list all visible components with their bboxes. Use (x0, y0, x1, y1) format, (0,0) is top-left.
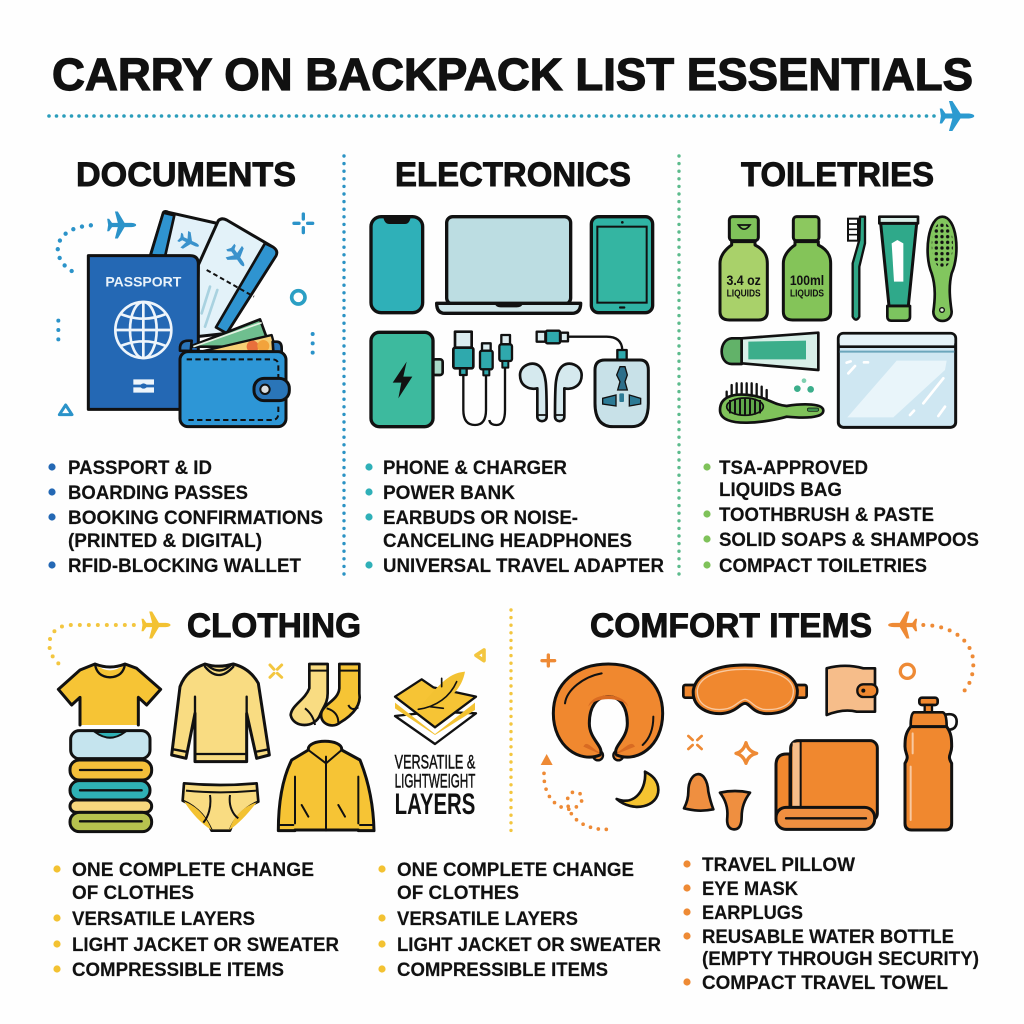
list: clothing: ONE COMPLETE CHANGE (72, 860, 314, 881)
icon: passport, tickets and wallet: PASSPORT (105, 273, 182, 289)
icon: toiletries items (720, 217, 956, 427)
icon: toiletries items: 3.4 oz (726, 272, 761, 288)
list: documents: RFID-BLOCKING WALLET (68, 556, 301, 577)
heading: documents: DOCUMENTS (76, 156, 296, 194)
heading: electronics: ELECTRONICS (395, 156, 631, 194)
panel: documents (48, 156, 323, 577)
heading: clothing: CLOTHING (187, 607, 361, 645)
list: comfort items: COMPACT TRAVEL TOWEL (702, 973, 948, 994)
list: documents: PASSPORT & ID (68, 458, 212, 479)
title: CARRY ON BACKPACK LIST ESSENTIALS (52, 49, 973, 100)
list: comfort items: EYE MASK (702, 879, 798, 900)
list: comfort items: REUSABLE WATER BOTTLE (702, 927, 954, 948)
list: electronics: EARBUDS OR NOISE- (383, 508, 578, 529)
list: clothing repeated: VERSATILE LAYERS (397, 909, 578, 930)
list: electronics: UNIVERSAL TRAVEL ADAPTER (383, 556, 664, 577)
list: documents: BOARDING PASSES (68, 483, 248, 504)
list: clothing: OF CLOTHES (72, 883, 194, 904)
icon: toiletries items: LIQUIDS (790, 288, 824, 299)
list: toiletries: COMPACT TOILETRIES (719, 556, 927, 577)
panel: toiletries (703, 156, 979, 577)
list: documents: BOOKING CONFIRMATIONS (68, 508, 323, 529)
icon: toiletries items: LIQUIDS (727, 288, 761, 299)
heading: comfort items: COMFORT ITEMS (590, 607, 872, 645)
icon: passport, tickets and wallet (58, 211, 313, 427)
icon: clothing items: LAYERS (395, 788, 475, 821)
list: clothing (53, 860, 339, 981)
list: toiletries: SOLID SOAPS & SHAMPOOS (719, 530, 979, 551)
list: comfort items: (EMPTY THROUGH SECURITY) (702, 949, 979, 970)
icon: plane on title rule (940, 101, 974, 131)
list: clothing: LIGHT JACKET OR SWEATER (72, 935, 339, 956)
list: clothing: COMPRESSIBLE ITEMS (72, 960, 284, 981)
list: documents: (PRINTED & DIGITAL) (68, 531, 262, 552)
panel: clothing (49, 607, 661, 981)
list: clothing: VERSATILE LAYERS (72, 909, 255, 930)
list: comfort items: TRAVEL PILLOW (702, 855, 855, 876)
icon: toiletries items: 100ml (790, 272, 824, 288)
list: toiletries (703, 458, 979, 577)
list: toiletries: TSA-APPROVED (719, 458, 868, 479)
icon: comfort items (541, 611, 973, 830)
list: clothing repeated: OF CLOTHES (397, 883, 519, 904)
list: electronics (365, 458, 664, 577)
icon: clothing items (49, 611, 484, 832)
icon: electronics devices (371, 217, 653, 427)
list: electronics: PHONE & CHARGER (383, 458, 567, 479)
list: toiletries: LIQUIDS BAG (719, 480, 842, 501)
list: clothing repeated: ONE COMPLETE CHANGE (397, 860, 634, 881)
list: toiletries: TOOTHBRUSH & PASTE (719, 505, 934, 526)
list: clothing repeated: LIGHT JACKET OR SWEATER (397, 935, 661, 956)
panel: electronics (365, 156, 664, 577)
heading: toiletries: TOILETRIES (741, 156, 934, 194)
icon: clothing items: LIGHTWEIGHT (395, 771, 475, 792)
list: documents (48, 458, 323, 577)
list: clothing repeated (378, 860, 661, 981)
list: comfort items (683, 855, 979, 994)
list: clothing repeated: COMPRESSIBLE ITEMS (397, 960, 608, 981)
list: electronics: CANCELING HEADPHONES (383, 531, 632, 552)
icon: clothing items: VERSATILE & (395, 753, 475, 774)
list: comfort items: EARPLUGS (702, 903, 803, 924)
panel: comfort items (541, 607, 979, 994)
list: electronics: POWER BANK (383, 483, 515, 504)
